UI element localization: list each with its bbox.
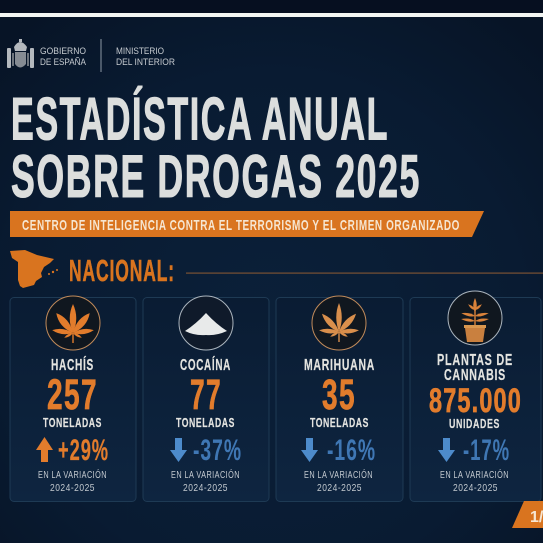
value: 35 toneladas: TONELADAS [310, 415, 369, 430]
variation: up 29%: EN LA VARIACIÓN [38, 468, 107, 481]
text: Gobierno de España [40, 46, 87, 68]
page badge [512, 501, 543, 528]
variation: down 16%: -16% [327, 434, 376, 467]
value: 35 toneladas [310, 371, 369, 430]
text: Gobierno de España: GOBIERNO [40, 46, 86, 57]
label: plantas de cannabis [437, 352, 513, 384]
label: cocaína: COCAÍNA [180, 355, 231, 374]
icon: potted cannabis plant [448, 291, 502, 345]
banner: subtitle [10, 211, 484, 237]
variation: down 17%: EN LA VARIACIÓN [440, 468, 509, 481]
value: 257 toneladas: 257 [47, 371, 98, 419]
variation: down 37%: -37% [193, 434, 242, 467]
variation: down 17%: 2024-2025 [453, 482, 498, 494]
label: marihuana: MARIHUANA [304, 357, 375, 374]
variation: down 17% [438, 434, 510, 494]
page badge: 1/ [530, 509, 543, 526]
label: plantas de cannabis: CANNABIS [444, 367, 506, 384]
value: 77 toneladas: TONELADAS [176, 415, 235, 430]
section heading: Nacional: NACIONAL: [69, 253, 175, 288]
panel: hachís [10, 296, 136, 502]
logo: Gobierno de España, Ministerio del Interior [7, 39, 175, 72]
section heading: Nacional [10, 250, 543, 288]
variation: down 37% [170, 434, 242, 494]
value: 875.000 unidades: UNIDADES [449, 416, 500, 431]
icon: hashish leaf [46, 296, 100, 350]
text: Ministerio del Interior: DEL INTERIOR [116, 57, 175, 68]
label: hachís: HACHÍS [51, 355, 94, 374]
variation: down 37%: 2024-2025 [183, 482, 228, 494]
icon: map of Spain [10, 250, 58, 288]
variation: down 37%: EN LA VARIACIÓN [171, 468, 240, 481]
variation: up 29%: +29% [58, 434, 109, 467]
panel: cocaína [143, 296, 269, 502]
value: 875.000 unidades [429, 382, 522, 431]
variation: down 16%: 2024-2025 [317, 482, 362, 494]
icon: marijuana leaf [312, 296, 366, 350]
text: Ministerio del Interior [116, 46, 175, 68]
icon: coat of arms [7, 39, 34, 68]
value: 77 toneladas: 77 [190, 371, 222, 419]
panel: plantas de cannabis [410, 291, 541, 502]
value: 257 toneladas [43, 371, 102, 430]
title [11, 86, 421, 210]
value: 257 toneladas: TONELADAS [43, 415, 102, 430]
variation: up 29% [36, 434, 109, 494]
value: 77 toneladas [176, 371, 235, 430]
icon: cocaine pile [179, 296, 233, 350]
text: Gobierno de España: DE ESPAÑA [40, 57, 87, 68]
value: 35 toneladas: 35 [322, 371, 356, 419]
text: Ministerio del Interior: MINISTERIO [116, 46, 164, 57]
variation: down 17%: -17% [463, 434, 510, 467]
variation: down 16%: EN LA VARIACIÓN [304, 468, 373, 481]
variation: up 29%: 2024-2025 [50, 482, 95, 494]
variation: down 16% [301, 434, 376, 494]
panel: marihuana [276, 296, 403, 502]
